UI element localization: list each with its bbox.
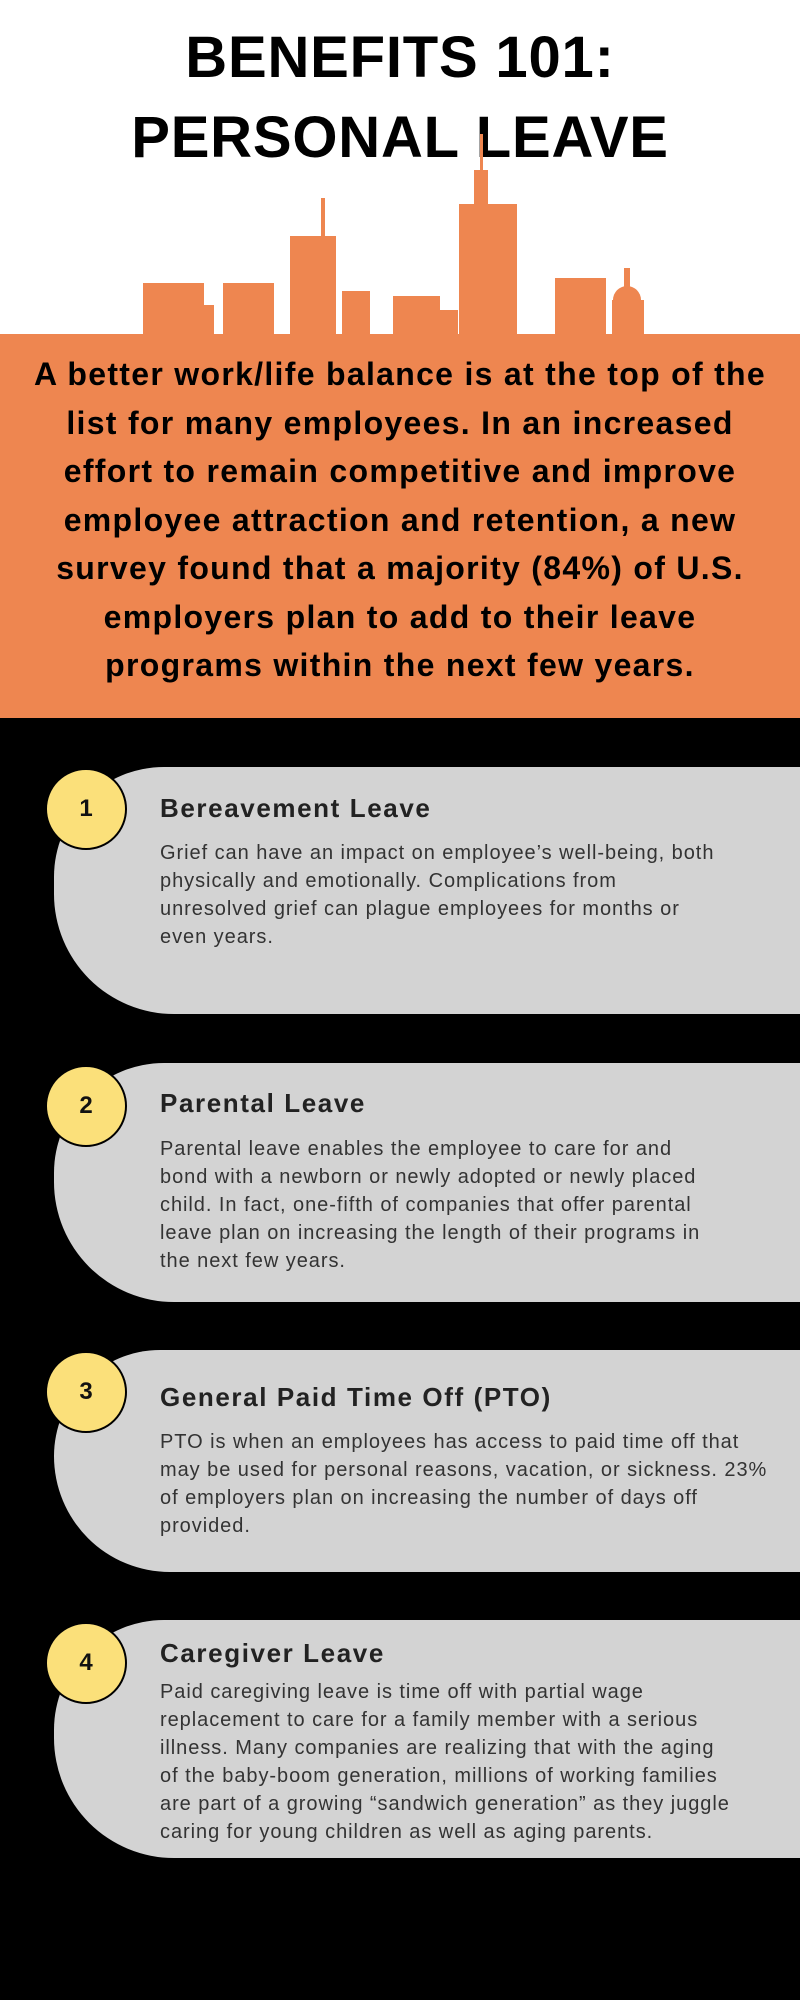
- card 4: caregiver leave: Paid caregiving leave is time off with partial wage: [160, 1681, 644, 1703]
- title: [131, 25, 669, 170]
- card 2: parental leave: child. In fact, one-fifth of companies that offer parental: [160, 1194, 692, 1216]
- card 4: caregiver leave: replacement to care for a family member with a serious: [160, 1709, 698, 1731]
- card 4: caregiver leave: caring for young children as well as aging parents.: [160, 1821, 653, 1843]
- intro text block: employers plan to add to their leave: [104, 598, 696, 634]
- intro text block: survey found that a majority (84%) of U.S.: [56, 550, 744, 586]
- intro text block: programs within the next few years.: [105, 647, 695, 683]
- card 4: caregiver leave: are part of a growing “sandwich generation” as they juggle: [160, 1793, 730, 1815]
- card 1: bereavement leave: Bereavement Leave: [160, 793, 431, 823]
- intro text block: effort to remain competitive and improve: [64, 453, 736, 489]
- number 3: [45, 1351, 127, 1433]
- card 3: PTO: General Paid Time Off (PTO): [160, 1382, 552, 1412]
- card 2: parental leave: [54, 1063, 800, 1302]
- card 3: PTO: of employers plan on increasing the number of days off: [160, 1487, 698, 1509]
- card 2: parental leave: the next few years.: [160, 1250, 346, 1272]
- intro text block: A better work/life balance is at the top of the: [34, 356, 766, 392]
- number 2: [45, 1065, 127, 1147]
- title: PERSONAL LEAVE: [131, 105, 669, 170]
- card 4: caregiver leave: illness. Many companies are realizing that with the aging: [160, 1737, 714, 1759]
- card 3: PTO: may be used for personal reasons, vacation, or sickness. 23%: [160, 1459, 767, 1481]
- card 3: PTO: [54, 1350, 800, 1572]
- card 1: bereavement leave: [54, 767, 800, 1014]
- number 2: 2: [79, 1092, 93, 1119]
- number 4: [45, 1622, 127, 1704]
- intro text block: list for many employees. In an increased: [66, 404, 734, 440]
- card 3: PTO: PTO is when an employees has access to paid time off that: [160, 1431, 739, 1453]
- number 1: 1: [79, 795, 93, 822]
- number 3: 3: [79, 1378, 93, 1405]
- title: BENEFITS 101:: [185, 25, 615, 90]
- number 4: 4: [79, 1649, 93, 1676]
- card 1: bereavement leave: even years.: [160, 926, 274, 948]
- card 1: bereavement leave: physically and emotionally. Complications from: [160, 870, 617, 892]
- card 3: PTO: provided.: [160, 1515, 251, 1537]
- card 2: parental leave: bond with a newborn or newly adopted or newly placed: [160, 1166, 696, 1188]
- card 1: bereavement leave: Grief can have an impact on employee’s well-being, both: [160, 842, 714, 864]
- skyline illustration: [143, 134, 644, 334]
- card 4: caregiver leave: of the baby-boom generation, millions of working families: [160, 1765, 718, 1787]
- card 2: parental leave: Parental Leave: [160, 1088, 366, 1118]
- header area: [0, 0, 800, 336]
- card 2: parental leave: Parental leave enables the employee to care for and: [160, 1138, 672, 1160]
- card 4: caregiver leave: Caregiver Leave: [160, 1638, 385, 1668]
- card 4: caregiver leave: [54, 1620, 800, 1858]
- intro text block: employee attraction and retention, a new: [64, 502, 736, 538]
- number 1: [45, 768, 127, 850]
- card 2: parental leave: leave plan on increasing the length of their programs in: [160, 1222, 700, 1244]
- card 1: bereavement leave: unresolved grief can plague employees for months or: [160, 898, 680, 920]
- intro text block: [0, 334, 800, 718]
